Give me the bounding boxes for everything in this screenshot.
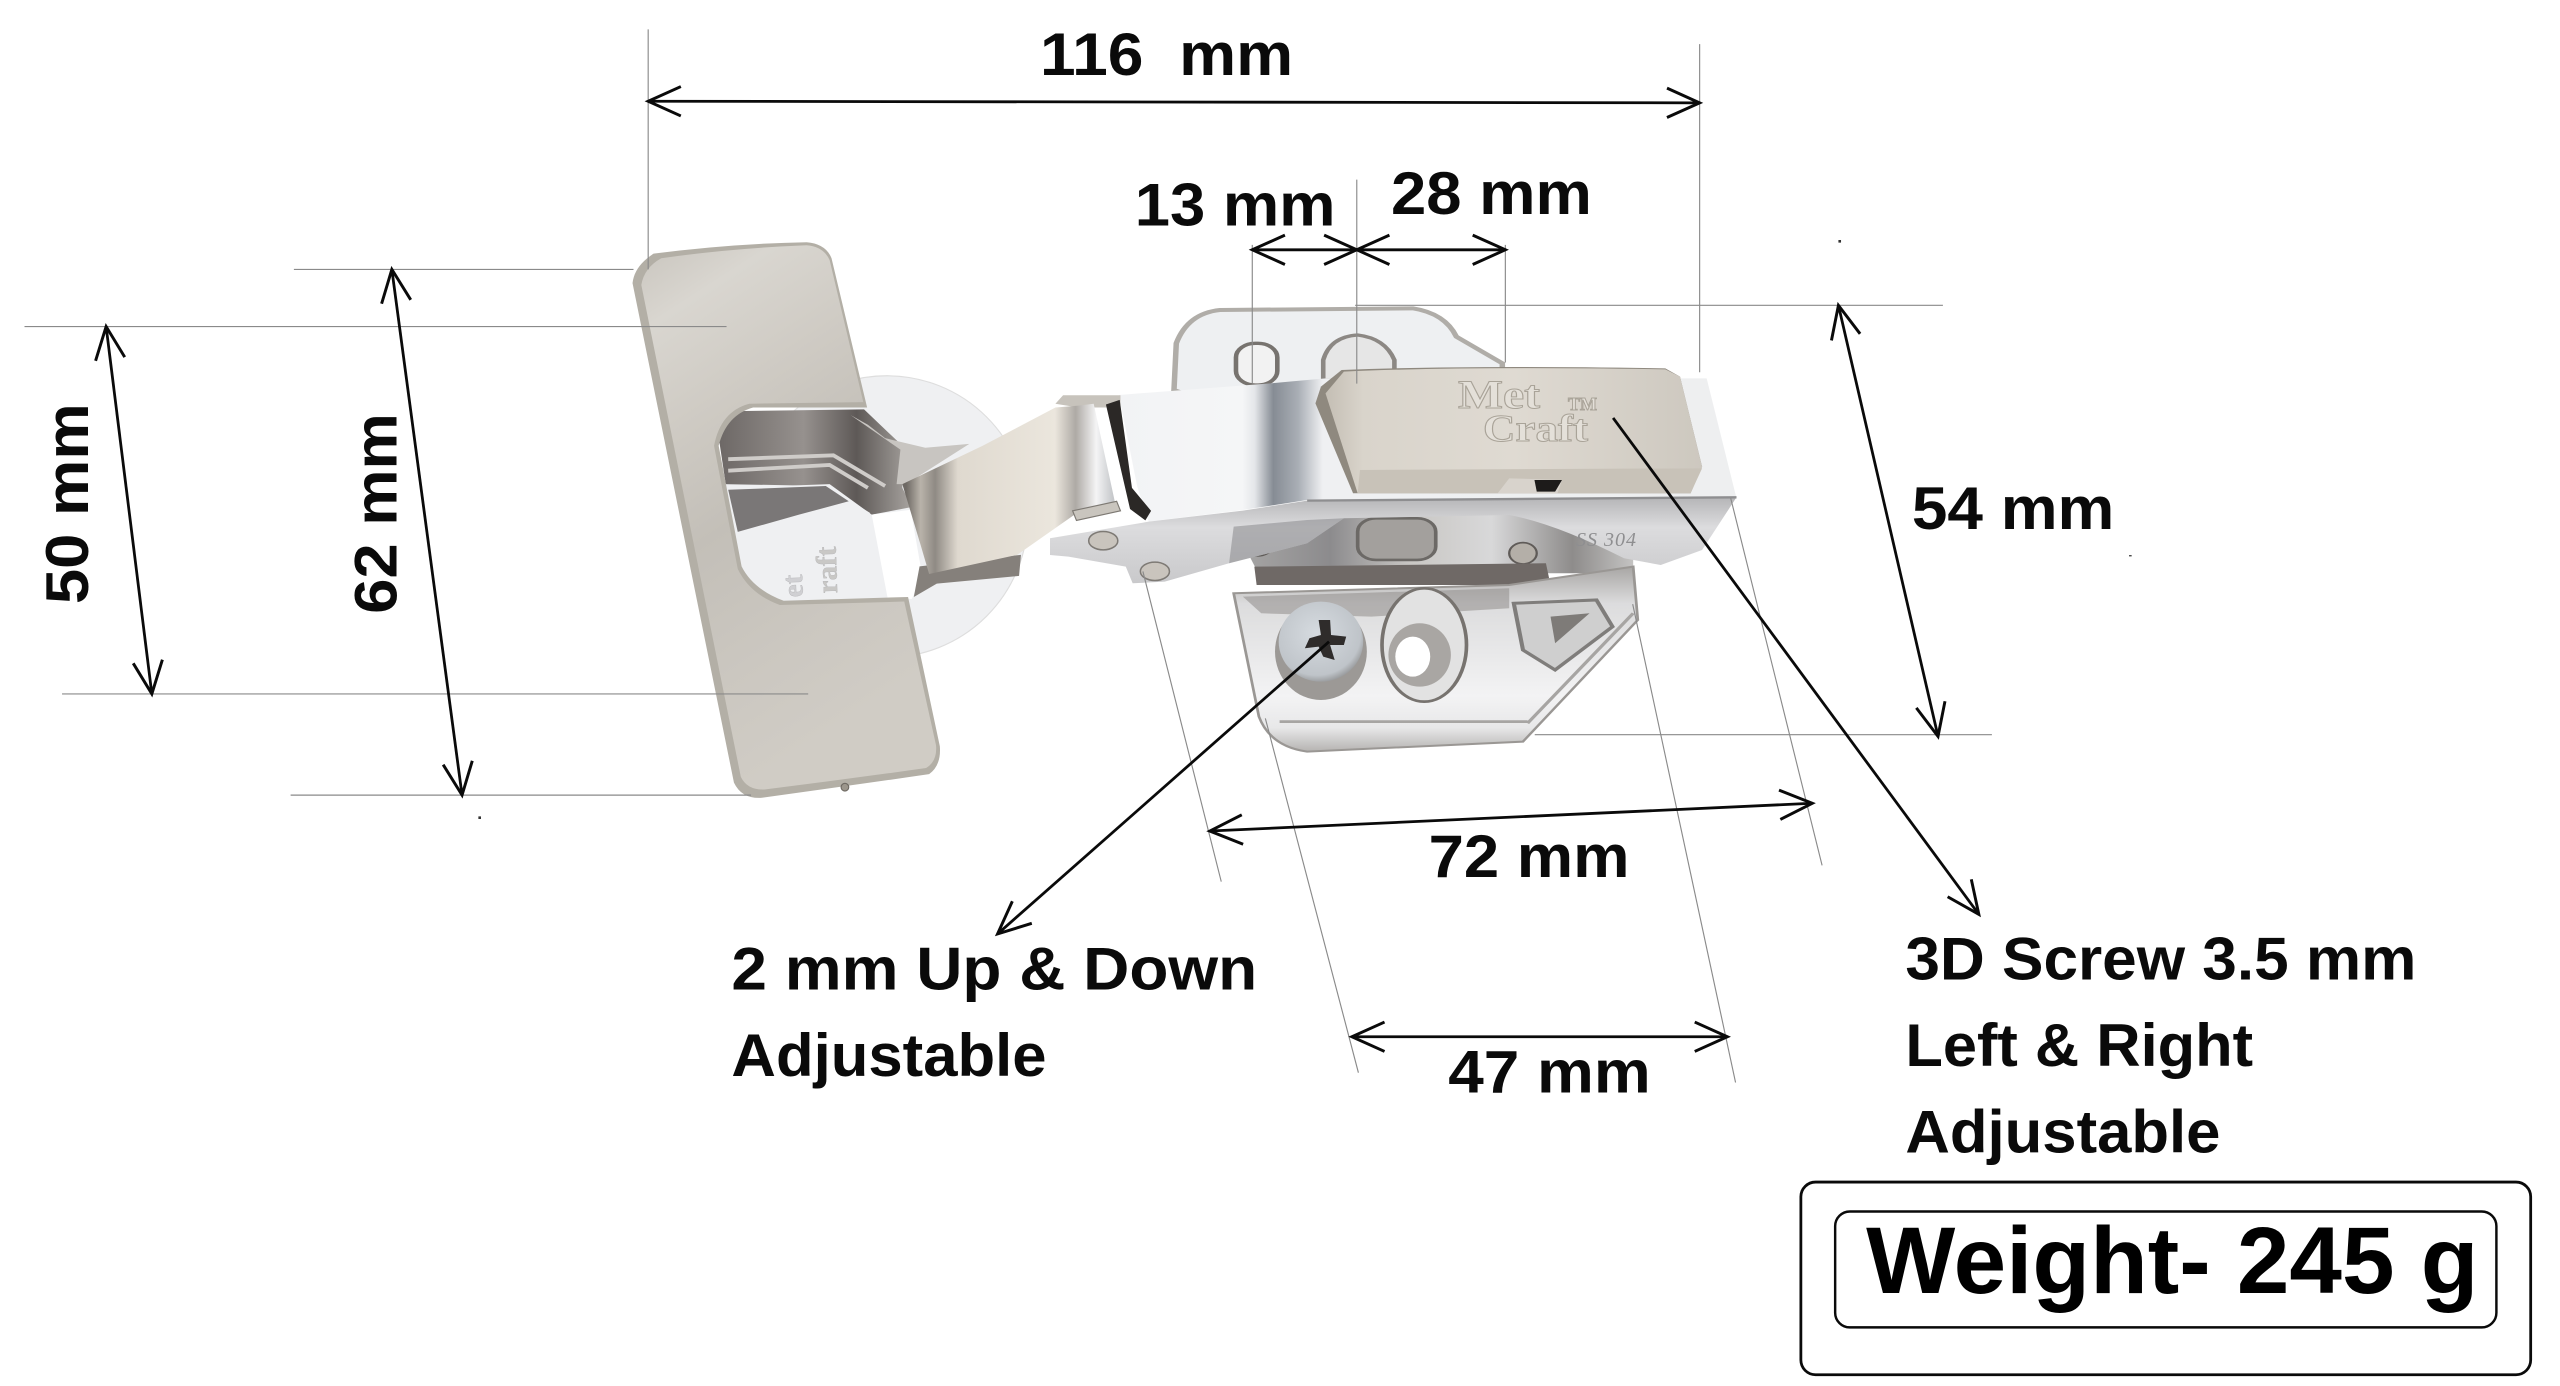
mounting base xyxy=(1234,567,1638,752)
base top dark band xyxy=(1243,588,1509,617)
pivot rivet lower xyxy=(1140,562,1169,581)
arrow 116 mm xyxy=(648,101,1700,103)
cap notch hole xyxy=(1534,480,1562,492)
callout: up and down adjustment xyxy=(731,934,1257,1089)
engraved text: TM: TM xyxy=(1568,394,1597,414)
label 116 mm: 116 mm xyxy=(1040,20,1293,88)
label 54 mm: 54 mm xyxy=(1912,474,2114,542)
weight box xyxy=(1801,1182,2531,1375)
hinge arm xyxy=(902,395,1169,597)
callout: 3D screw adjustment: 3D Screw 3.5 mm xyxy=(1905,925,2416,993)
rear mounting plate xyxy=(1174,308,1502,393)
chrome body top xyxy=(1119,378,1737,522)
callout: 3D screw adjustment: Adjustable xyxy=(1905,1098,2220,1166)
body bright lower edge xyxy=(1307,497,1737,501)
ramp triangle xyxy=(1551,613,1590,643)
cup mirror surface xyxy=(722,484,889,605)
arrow 13 mm xyxy=(1252,249,1357,251)
adjustment eyelet xyxy=(1382,588,1466,702)
mounting plate xyxy=(633,242,940,798)
dark recess of plate xyxy=(715,409,912,515)
callout: 3D screw adjustment xyxy=(1905,925,2416,1166)
callout: up and down adjustment: 2 mm Up & Down xyxy=(731,934,1257,1002)
base lower bevel xyxy=(1280,613,1633,723)
mirror engraved mark xyxy=(777,546,844,598)
arm underside link xyxy=(914,555,1021,597)
knuckle top bar xyxy=(1055,395,1120,408)
eyelet hole xyxy=(1395,637,1430,677)
black gap of the knuckle xyxy=(1106,400,1151,520)
engraved text: Craft: raft xyxy=(811,546,844,594)
mechanism behind the body xyxy=(1229,510,1633,573)
mechanism rivet left xyxy=(1241,537,1272,556)
pivot sleeve xyxy=(1073,501,1120,520)
mirror shadow xyxy=(728,486,849,532)
chrome body underside xyxy=(1050,497,1737,583)
label 28 mm: 28 mm xyxy=(1391,159,1592,227)
engraved text: Met: Met xyxy=(1458,372,1541,417)
chrome link from cup to arm xyxy=(851,415,969,484)
cup plate with round disc xyxy=(633,242,1028,798)
adjustment slot right xyxy=(1323,335,1394,380)
arm panel xyxy=(902,404,1115,574)
arrow 47 mm xyxy=(1352,1036,1727,1038)
callout: up and down adjustment: Adjustable xyxy=(731,1021,1047,1089)
mechanism pocket xyxy=(1358,518,1436,560)
ramp detail xyxy=(1514,600,1613,670)
label 47 mm: 47 mm xyxy=(1448,1037,1651,1105)
mounting base shadow strip xyxy=(1254,563,1551,585)
cap engraving xyxy=(1458,372,1597,450)
extension lines xyxy=(24,29,1992,1082)
label 62 mm: 62 mm xyxy=(342,413,410,614)
hinge photograph illustration xyxy=(633,242,1737,798)
round disc behind the plate xyxy=(746,376,1028,657)
callout: 3D screw adjustment: Left & Right xyxy=(1905,1011,2253,1079)
arrow 62 mm xyxy=(392,269,462,795)
pivot rivet upper xyxy=(1089,532,1118,550)
arrow 50 mm xyxy=(106,327,152,694)
arrow up and down screw xyxy=(998,642,1329,934)
weight text: Weight- 245 g xyxy=(1866,1208,2478,1314)
arrow 54 mm xyxy=(1838,305,1938,736)
mounting screw xyxy=(1275,602,1367,700)
cap lower bevel xyxy=(1358,468,1702,493)
small stray dots xyxy=(478,240,2132,819)
screw cross xyxy=(1305,620,1346,660)
adjustment slot left xyxy=(1236,343,1277,385)
cap notch xyxy=(1498,478,1562,493)
plate bottom rivet xyxy=(841,783,849,791)
label 13 mm: 13 mm xyxy=(1135,170,1336,238)
label 50 mm: 50 mm xyxy=(33,403,101,604)
arrow 3D screw xyxy=(1613,418,1979,914)
arrow 28 mm xyxy=(1357,249,1505,251)
stamped text SS 304: SS 304 xyxy=(1576,529,1637,551)
stamped underside shade xyxy=(1229,518,1344,563)
label 72 mm: 72 mm xyxy=(1429,822,1629,890)
square cut-out xyxy=(872,510,922,599)
hinge main body xyxy=(1050,308,1737,752)
arrow 72 mm xyxy=(1210,803,1812,831)
metal cap xyxy=(1315,367,1702,493)
engraved text: Craft: Craft xyxy=(1483,408,1588,450)
chrome channel highlights xyxy=(728,455,885,488)
engraved text: Met: et xyxy=(777,574,810,598)
mechanism rivet right xyxy=(1509,543,1537,564)
arrows xyxy=(106,101,1979,1037)
